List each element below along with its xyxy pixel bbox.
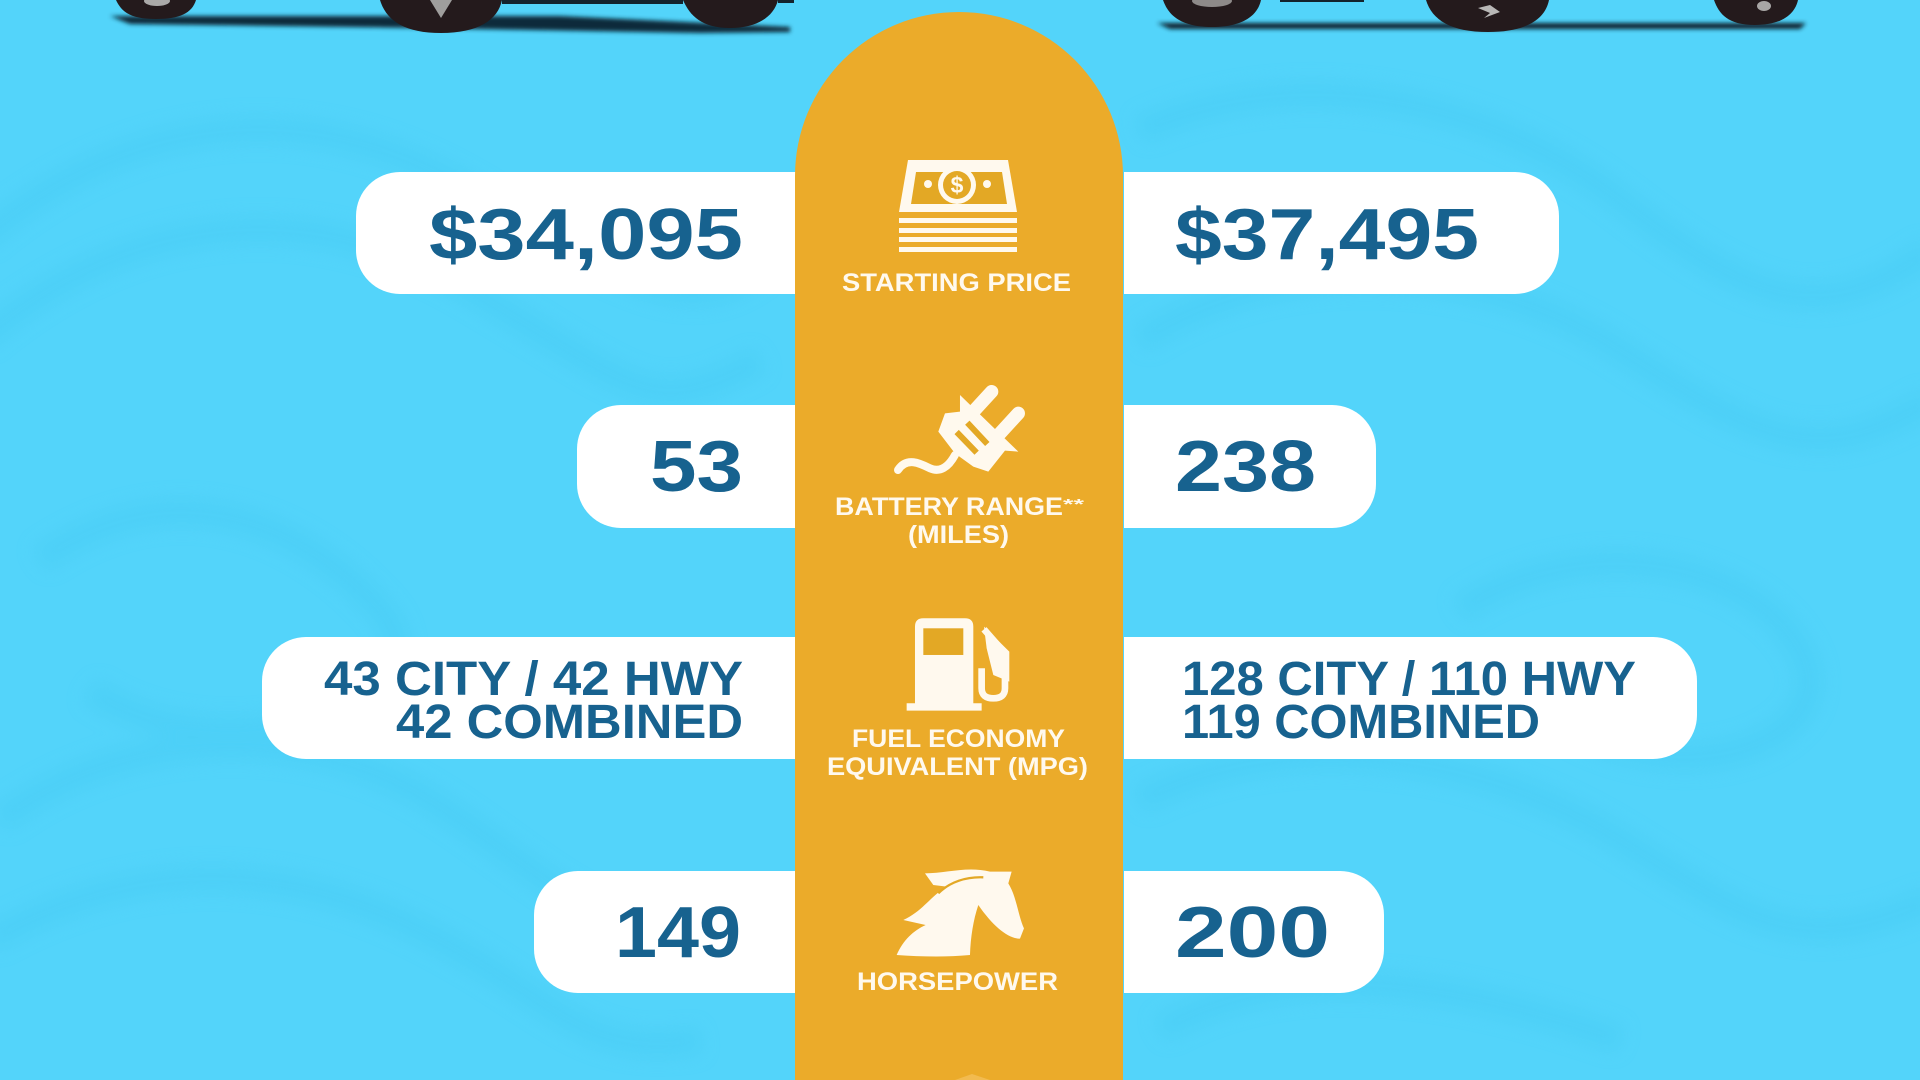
next row icon fragment at bottom edge xyxy=(955,1074,990,1080)
label: equivalent mpg: EQUIVALENT (MPG) xyxy=(827,753,1088,781)
label: horsepower: HORSEPOWER xyxy=(857,968,1058,996)
icon: stack of money: $ xyxy=(951,172,964,198)
label: battery range: BATTERY RANGE xyxy=(835,493,1063,521)
icon: electric plug xyxy=(898,392,1018,472)
label: fuel economy: FUEL ECONOMY xyxy=(852,725,1065,753)
panel: value pills xyxy=(262,172,1697,993)
value: right battery range: 238 xyxy=(1175,427,1316,507)
center orange column xyxy=(795,12,1123,1080)
value: left fuel economy: 43 CITY / 42 HWY xyxy=(324,653,743,706)
value: left starting price: $34,095 xyxy=(429,195,743,275)
value: left battery range: 53 xyxy=(650,427,743,507)
icon: fuel pump xyxy=(907,618,1009,711)
label: starting price: STARTING PRICE xyxy=(842,269,1071,297)
value: left fuel economy xyxy=(324,653,743,749)
right car: wheels and shadow xyxy=(1157,0,1806,32)
horsepower row xyxy=(615,870,1330,996)
label: miles: (MILES) xyxy=(908,521,1009,549)
battery range row xyxy=(650,392,1316,549)
fuel economy row xyxy=(324,618,1636,781)
value: left horsepower: 149 xyxy=(615,893,741,973)
icon: stack of money xyxy=(899,160,1017,252)
value: right fuel economy: 119 COMBINED xyxy=(1182,696,1540,749)
value: left fuel economy: 42 COMBINED xyxy=(396,696,743,749)
value: right fuel economy xyxy=(1182,653,1636,749)
value: right starting price: $37,495 xyxy=(1175,195,1479,275)
icon: horse head xyxy=(897,870,1024,956)
value: right fuel economy: 128 CITY / 110 HWY xyxy=(1182,653,1636,706)
left car: wheels and shadow xyxy=(110,0,794,33)
starting price row xyxy=(429,160,1479,297)
label: footnote marks: ** xyxy=(1063,496,1084,513)
value: right horsepower: 200 xyxy=(1175,893,1330,973)
